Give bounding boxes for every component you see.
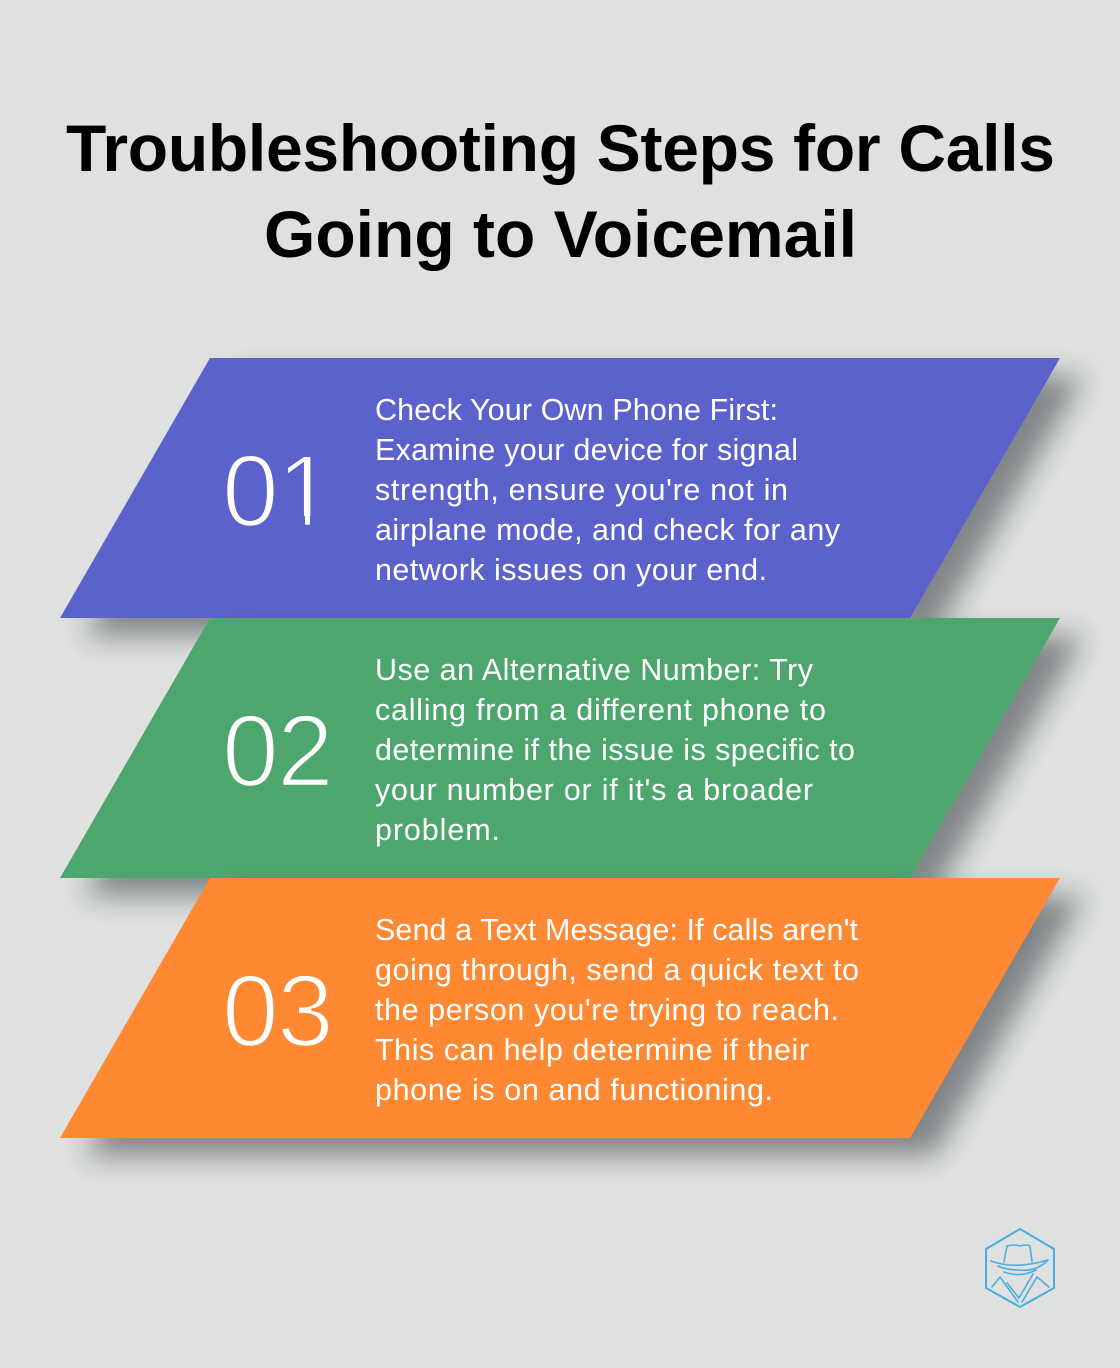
text: step 03 description: Send a Text Message: If calls aren't [375,913,859,947]
text: step 01 description: network issues on your end. [375,553,767,587]
text: step 03 description: the person you're trying to reach. [375,993,839,1027]
text: step 02 description: Use an Alternative Number: Try [375,653,814,687]
panel: step 01 [60,358,1084,636]
text: step 03 description: going through, send a quick text to [375,953,859,987]
text: step 01 description: Check Your Own Phone First: [375,393,778,427]
icon: hexagon logo with hat [986,1229,1054,1307]
text: step 01 description: airplane mode, and check for any [375,513,841,547]
text: step 03 description: This can help determine if their [375,1033,809,1067]
panel: step 03 [60,878,1084,1156]
text: step 02 description: problem. [375,813,500,847]
panel: step 02 [60,618,1084,896]
title: Going to Voicemail [264,197,857,271]
text: step 02 description: your number or if it's a broader [375,773,813,807]
text: step 03 description [375,913,859,1107]
number 02: 02 [222,694,334,808]
text: step 01 description [375,393,841,587]
text: step 02 description [375,653,855,847]
number 01: 01 [222,434,334,548]
text: step 02 description: determine if the issue is specific to [375,733,855,767]
number 03: 03 [222,954,334,1068]
text: step 01 description: strength, ensure you're not in [375,473,788,507]
title [66,111,1055,271]
title: Troubleshooting Steps for Calls [66,111,1055,185]
text: step 03 description: phone is on and functioning. [375,1073,773,1107]
text: step 02 description: calling from a different phone to [375,693,826,727]
text: step 01 description: Examine your device for signal [375,433,798,467]
